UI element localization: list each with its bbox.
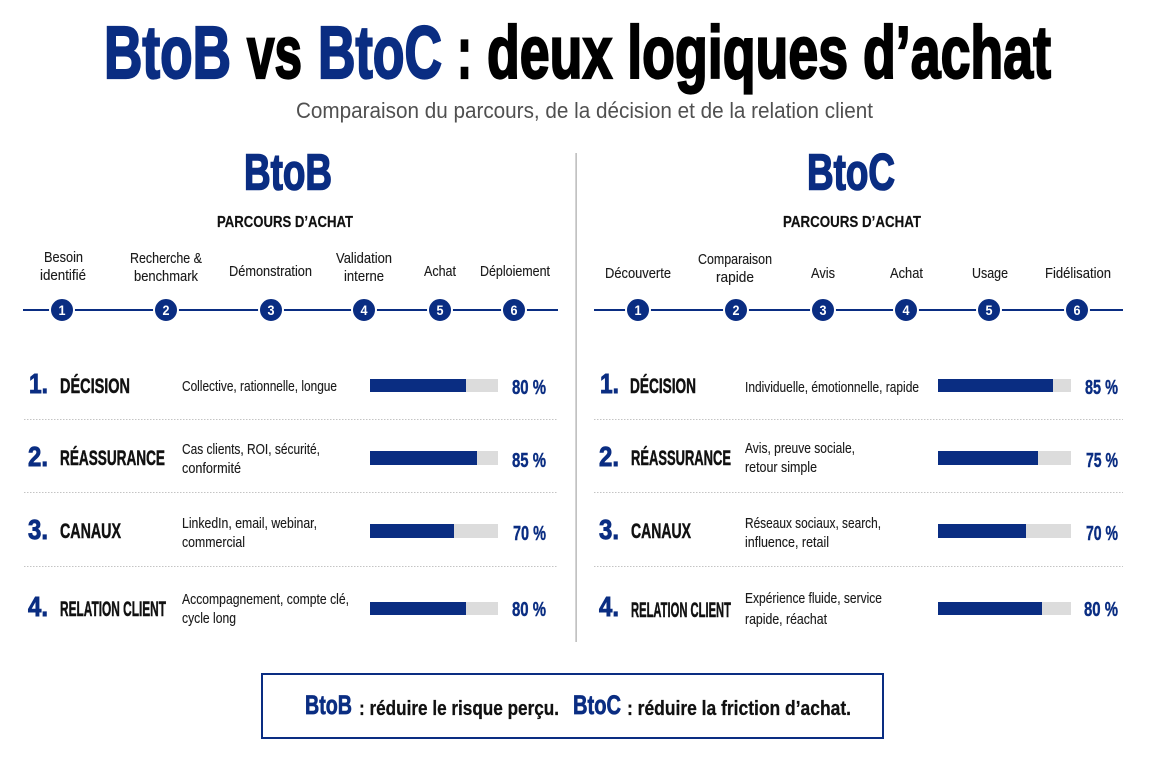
callout: : réduire la friction d’achat. (627, 697, 851, 720)
row: réassurance: 2. (28, 441, 48, 472)
heading: parcours d'achat: PARCOURS D’ACHAT (217, 214, 353, 231)
row: relation client BtoC: 4. (599, 591, 619, 622)
row: relation client: 4. (28, 591, 48, 622)
panel: BtoC (594, 144, 1123, 628)
callout: : réduire le risque perçu. (359, 697, 559, 720)
journey timeline BtoC: 5 (986, 302, 993, 318)
row: canaux BtoC: 3. (599, 514, 619, 545)
journey timeline BtoC (594, 298, 1123, 322)
journey timeline BtoC: 4 (902, 302, 910, 318)
journey timeline BtoC: 2 (732, 302, 740, 318)
row: relation client BtoC: Expérience fluide, service (745, 591, 882, 607)
journey timeline BtoC: 6 (1074, 302, 1081, 318)
journey labels: Achat (424, 264, 456, 280)
row: réassurance BtoC: 2. (599, 441, 619, 472)
row: réassurance BtoC: 75 % (1086, 450, 1118, 472)
row: décision: 1. (29, 368, 48, 399)
row: canaux: commercial (182, 535, 245, 551)
row: réassurance: Cas clients, ROI, sécurité, (182, 442, 320, 458)
row: réassurance BtoC (599, 441, 1118, 476)
heading: BtoC: BtoC (807, 144, 895, 200)
journey timeline: 6 (510, 302, 518, 318)
row: relation client: 80 % (512, 599, 546, 621)
journey labels BtoC: Usage (972, 266, 1008, 282)
row: canaux BtoC: 70 % (1086, 523, 1118, 545)
row: réassurance: conformité (182, 461, 241, 477)
journey labels (40, 250, 550, 285)
row: relation client: RELATION CLIENT (60, 598, 166, 621)
row: décision BtoC: 1. (600, 368, 619, 399)
row: relation client (28, 591, 546, 627)
central divider (576, 153, 577, 642)
callout: BtoB (305, 690, 352, 720)
journey timeline: 4 (360, 302, 368, 318)
row: décision (29, 368, 546, 399)
journey timeline BtoC: 1 (634, 302, 642, 318)
row: relation client BtoC: rapide, réachat (745, 612, 827, 628)
row: décision BtoC (600, 368, 1118, 399)
row: décision: Collective, rationnelle, longue (182, 379, 337, 395)
row: réassurance BtoC: RÉASSURANCE (631, 447, 731, 470)
journey labels BtoC (605, 252, 1111, 286)
journey labels: benchmark (134, 269, 199, 285)
title: BtoB (104, 11, 231, 94)
journey labels: identifié (40, 268, 86, 284)
row: réassurance BtoC: Avis, preuve sociale, (745, 441, 855, 457)
journey labels BtoC: Avis (811, 266, 835, 282)
subtitle: Comparaison du parcours, de la décision et de la relation client (296, 98, 873, 123)
row: décision BtoC: 85 % (1085, 377, 1118, 399)
journey timeline: 3 (268, 302, 275, 318)
journey timeline: 1 (58, 302, 66, 318)
callout: BtoC (573, 690, 621, 720)
row: relation client BtoC (599, 591, 1118, 628)
title: : (457, 11, 472, 94)
row: canaux: LinkedIn, email, webinar, (182, 516, 317, 532)
journey labels: interne (344, 269, 384, 285)
journey labels BtoC: Découverte (605, 266, 671, 282)
row: canaux BtoC (599, 514, 1118, 551)
row: relation client: Accompagnement, compte clé, (182, 592, 349, 608)
journey timeline BtoC: 3 (820, 302, 827, 318)
row: décision: DÉCISION (60, 375, 130, 398)
title: vs (247, 11, 302, 94)
journey labels: Déploiement (480, 264, 550, 280)
callout (262, 674, 883, 738)
journey labels BtoC: rapide (716, 270, 754, 286)
row: canaux (28, 514, 546, 551)
row: canaux BtoC: Réseaux sociaux, search, (745, 516, 881, 532)
row: relation client BtoC: RELATION CLIENT (631, 599, 731, 622)
journey labels BtoC: Achat (890, 266, 923, 282)
journey timeline (23, 298, 558, 322)
row: relation client BtoC: 80 % (1084, 599, 1118, 621)
panel: BtoB (23, 144, 558, 627)
row: relation client: cycle long (182, 611, 236, 627)
journey labels: Démonstration (229, 264, 312, 280)
row: réassurance BtoC: retour simple (745, 460, 817, 476)
title: BtoC (318, 11, 442, 94)
row: canaux BtoC: influence, retail (745, 535, 829, 551)
row: canaux: CANAUX (60, 520, 121, 543)
journey timeline: 2 (162, 302, 170, 318)
row: réassurance: 85 % (512, 450, 546, 472)
journey labels: Validation (336, 251, 392, 267)
row: réassurance: RÉASSURANCE (60, 447, 165, 470)
row: réassurance (28, 441, 546, 477)
row: canaux: 70 % (513, 523, 546, 545)
title (104, 11, 1051, 94)
heading: parcours d'achat BtoC: PARCOURS D’ACHAT (783, 214, 921, 231)
heading: BtoB: BtoB (244, 144, 332, 200)
row: décision BtoC: DÉCISION (630, 375, 696, 398)
row: canaux BtoC: CANAUX (631, 520, 691, 543)
row: canaux: 3. (28, 514, 48, 545)
row: décision BtoC: Individuelle, émotionnelle, rapide (745, 380, 919, 396)
row: décision: 80 % (512, 377, 546, 399)
journey labels: Besoin (44, 250, 83, 266)
journey labels BtoC: Fidélisation (1045, 266, 1111, 282)
journey labels: Recherche & (130, 251, 202, 267)
journey labels BtoC: Comparaison (698, 252, 772, 268)
journey timeline: 5 (436, 302, 444, 318)
